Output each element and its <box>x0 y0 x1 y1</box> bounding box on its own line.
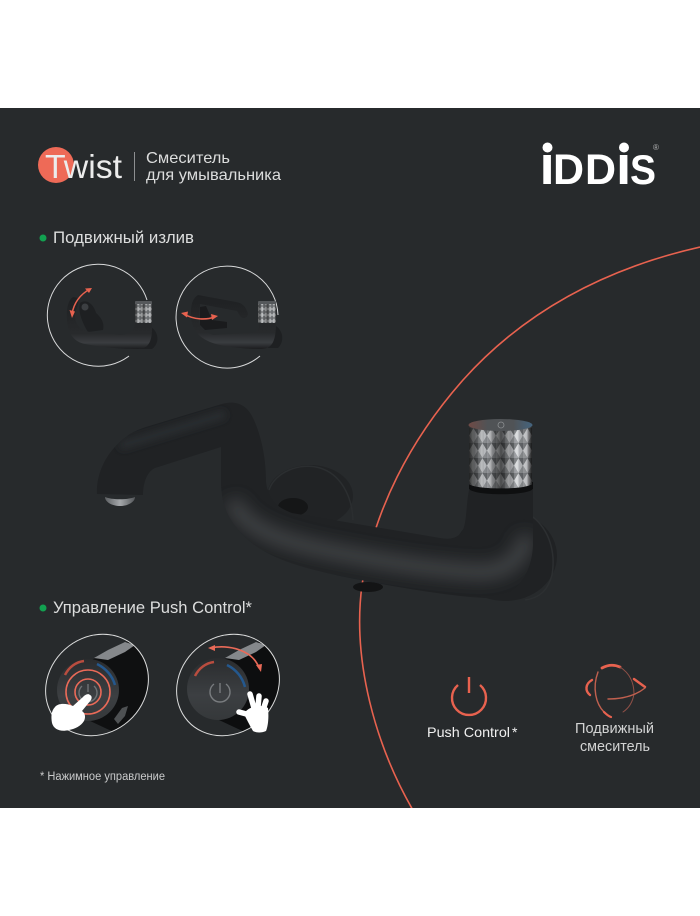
heading: Push Control: Управление Push Control* <box>53 599 253 617</box>
brand logo: IDDIS: D <box>585 146 616 194</box>
feature: movable faucet <box>575 665 654 755</box>
feature: Push Control: Push Control <box>427 724 510 740</box>
illustration: push control rotate <box>176 634 280 736</box>
product logo: Twist: Twist <box>45 148 122 185</box>
faucet body <box>97 403 533 598</box>
background panel <box>0 108 700 808</box>
faucet aerator <box>105 497 135 506</box>
brand logo: IDDIS: i <box>616 134 631 196</box>
header divider <box>134 152 135 181</box>
illustration: spout swivel position 2 <box>176 266 282 368</box>
brand logo: IDDIS <box>540 134 659 196</box>
product subtitle <box>146 150 281 184</box>
feature: movable faucet: смеситель <box>580 739 650 755</box>
feature: Push Control <box>427 677 518 740</box>
faucet right flange <box>453 511 557 601</box>
icon: pointing hand <box>51 694 92 731</box>
faucet knob <box>468 419 533 494</box>
feature: Push Control: * <box>512 724 518 740</box>
decorative coral arc <box>360 247 700 812</box>
brand logo: IDDIS: S <box>630 146 656 193</box>
brand logo: IDDIS: ® <box>653 143 659 152</box>
product subtitle: для умывальника <box>146 167 281 184</box>
rotation arrow <box>208 645 262 672</box>
heading: movable spout: Подвижный излив <box>53 229 194 247</box>
icon: open hand <box>239 694 268 732</box>
brand logo: IDDIS: i <box>540 134 555 196</box>
main product: wall faucet <box>97 403 557 601</box>
illustration: push control press <box>45 634 149 736</box>
faucet back flange <box>267 465 353 527</box>
feature: movable faucet: Подвижный <box>575 721 654 737</box>
faucet bottom valve <box>353 582 383 592</box>
illustration: spout swivel position 1 <box>47 264 157 366</box>
footnote: * Нажимное управление <box>40 771 165 783</box>
product subtitle: Смеситель <box>146 150 230 167</box>
icon: power <box>452 677 486 715</box>
icon: orbit <box>586 665 645 717</box>
brand logo: IDDIS: D <box>553 146 584 194</box>
